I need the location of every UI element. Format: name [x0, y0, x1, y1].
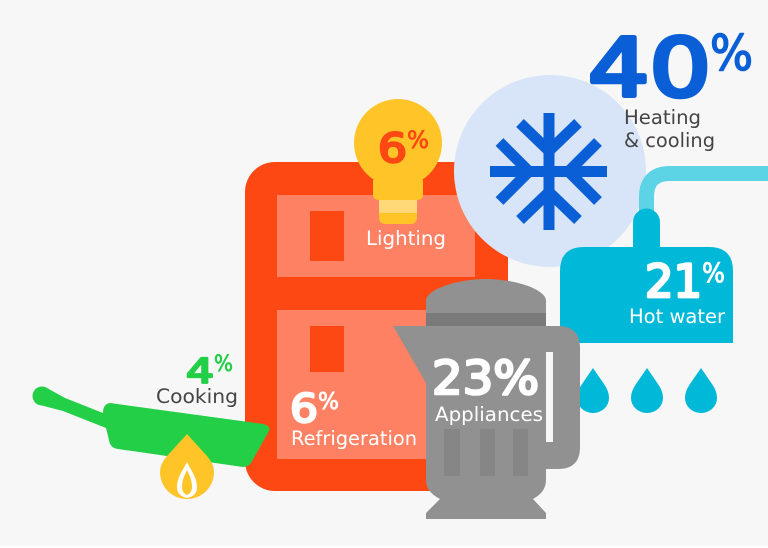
heating and cooling percentage: 40 — [588, 22, 711, 115]
cooking label — [156, 352, 238, 408]
icon: flame — [160, 434, 214, 499]
lighting label — [366, 126, 446, 250]
icon: light bulb — [354, 99, 442, 224]
cooking label: Cooking — [156, 385, 238, 408]
lighting label: 6 — [378, 126, 407, 172]
appliances label — [432, 351, 543, 426]
appliances label: 23% — [432, 351, 539, 405]
icon: shower head — [560, 208, 733, 343]
icon: kettle — [393, 279, 580, 519]
appliances label: Appliances — [435, 403, 543, 426]
pipe — [646, 174, 768, 220]
heating and cooling label: Heating — [624, 106, 701, 129]
hot water label: % — [702, 258, 725, 289]
cooking label: % — [214, 352, 233, 377]
refrigeration label: 6 — [290, 387, 318, 432]
heating and cooling percentage — [588, 22, 753, 115]
hot water label — [629, 255, 726, 328]
heating and cooling label — [624, 106, 715, 152]
heating and cooling label: & cooling — [624, 129, 715, 152]
icon: water drops — [577, 368, 717, 413]
refrigeration label: % — [318, 389, 339, 415]
hot water label: 21 — [645, 255, 702, 308]
icon: frying pan — [32, 386, 269, 467]
lighting label: Lighting — [366, 227, 446, 250]
cooking label: 4 — [186, 352, 214, 392]
lighting label: % — [407, 126, 429, 154]
circle: heating and cooling — [454, 75, 646, 267]
icon: snowflake — [490, 113, 607, 230]
refrigeration label: Refrigeration — [291, 427, 417, 450]
heating and cooling percentage: % — [710, 25, 753, 82]
panel: refrigerator — [245, 162, 508, 491]
hot water label: Hot water — [629, 305, 726, 328]
refrigeration label — [290, 387, 417, 450]
